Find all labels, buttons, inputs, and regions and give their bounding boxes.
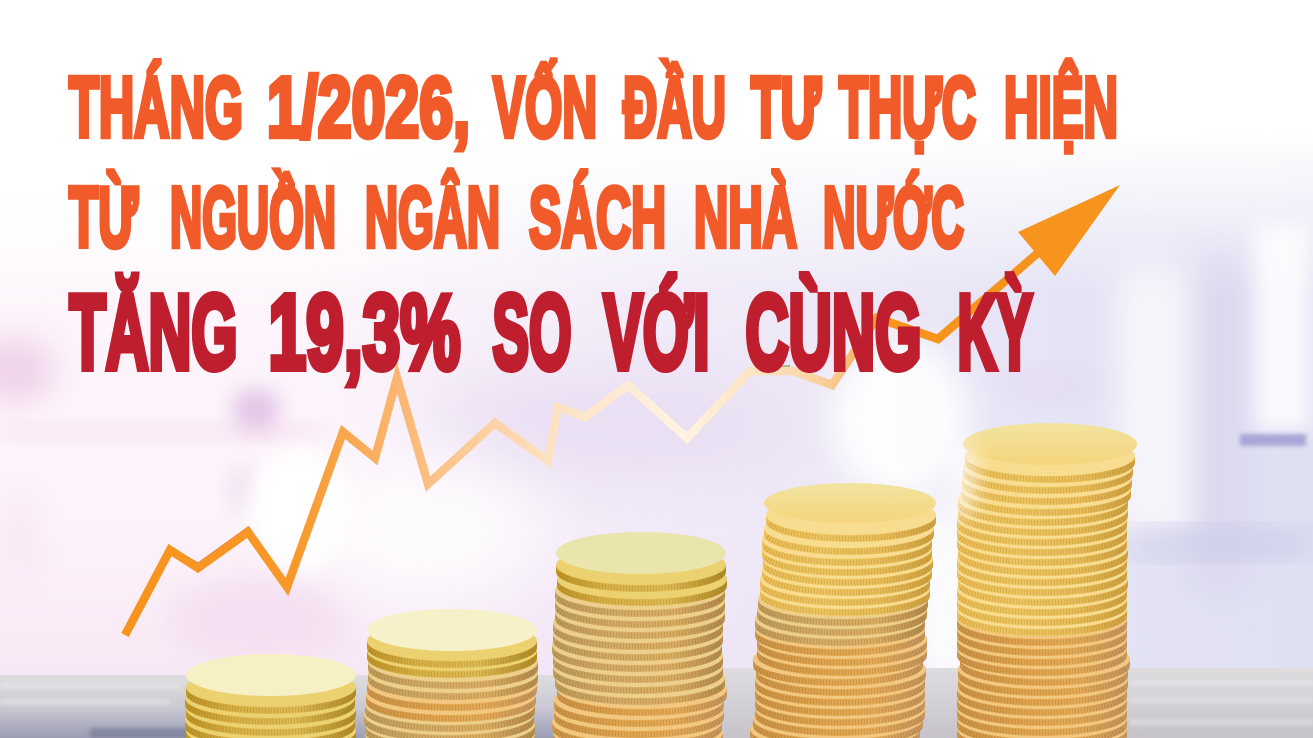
title line 1: ĐẦU <box>623 60 726 156</box>
title line 3 highlight: VỚI <box>604 274 710 392</box>
table surface <box>0 668 1313 738</box>
title line 3 highlight: CÙNG <box>746 274 922 392</box>
title line 1: 1/2026, <box>267 60 470 156</box>
title line 1: HIỆN <box>1004 60 1118 156</box>
title line 1 <box>69 60 1118 156</box>
title line 2: SÁCH <box>529 170 666 266</box>
title line 3 highlight: SO <box>492 274 572 392</box>
title line 1: VỐN <box>493 60 597 156</box>
title line 2: NHÀ <box>694 170 797 266</box>
line colour fringes <box>169 430 342 582</box>
rising line arrow <box>125 185 1120 635</box>
title line 3 highlight: KỲ <box>958 274 1032 392</box>
title line 2: NGÂN <box>365 170 500 266</box>
coin stack 5 <box>957 423 1137 738</box>
title line 2: TỪ <box>69 170 138 266</box>
title line 1: THÁNG <box>69 60 243 156</box>
title line 2: NƯỚC <box>823 170 964 266</box>
coin stack 2 <box>364 609 538 738</box>
stack 2 top coin <box>367 609 537 651</box>
stack 4 top coin <box>764 483 936 523</box>
stack 1 top coin <box>186 654 356 696</box>
stack 3 top coin <box>556 532 726 574</box>
title line 1: THỰC <box>839 60 976 156</box>
title line 2: NGUỒN <box>170 170 336 266</box>
glow on stack 5 <box>948 440 976 520</box>
coin stack 3 <box>552 532 727 738</box>
title line 3 highlight: TĂNG <box>70 274 237 392</box>
title line 2 <box>69 170 964 266</box>
coin stack 4 <box>750 483 936 738</box>
title line 1: TƯ <box>751 60 821 156</box>
title line 3 highlight <box>70 274 1032 392</box>
title line 3 highlight: 19,3% <box>268 274 460 392</box>
stack 5 top coin <box>963 423 1137 465</box>
coin stack 1 <box>185 654 356 738</box>
